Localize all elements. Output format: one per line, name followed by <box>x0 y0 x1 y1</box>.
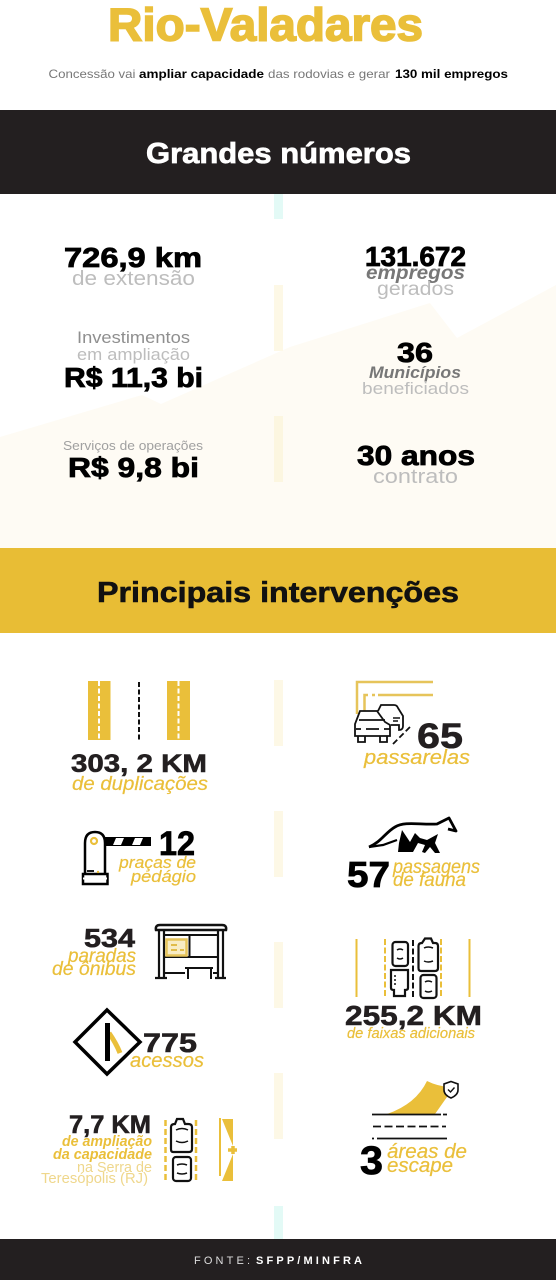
icon: road duplication <box>88 681 190 740</box>
stat: investimentos em ampliação: Investimentos <box>77 328 190 347</box>
stat: ampliação da capacidade: na Serra de <box>77 1160 152 1176</box>
background mountain shape <box>0 285 556 548</box>
stat: ampliação da capacidade: de ampliação <box>62 1134 152 1150</box>
stat: empregos: 131.672 <box>365 241 466 272</box>
stat: municípios: Municípios <box>369 363 461 382</box>
stat: acessos: 775 <box>143 1028 197 1058</box>
icon: escape ramp <box>372 1081 458 1138</box>
icon: access sign <box>75 1010 140 1074</box>
source credit <box>194 1255 362 1267</box>
stat: acessos <box>130 1028 204 1072</box>
stat: ampliação da capacidade: Teresópolis (RJ) <box>41 1171 148 1187</box>
stat: ampliação da capacidade: da capacidade <box>53 1147 152 1163</box>
stat: investimentos em ampliação: em ampliação <box>77 345 190 364</box>
stat: investimentos em ampliação: R$ 11,3 bi <box>64 362 203 393</box>
icon: bus stop <box>155 925 226 979</box>
stat: passagens de fauna: 57 <box>347 854 390 895</box>
stat: áreas de escape: escape <box>387 1155 453 1177</box>
stat: extensão: de extensão <box>72 268 195 290</box>
stat: praças de pedágio <box>118 825 196 886</box>
stat: serviços de operações: R$ 9,8 bi <box>68 452 199 483</box>
stat: ampliação da capacidade <box>41 1111 152 1187</box>
footer <box>0 1239 556 1280</box>
subtitle: ampliar capacidade <box>139 67 264 81</box>
stat: acessos: acessos <box>130 1050 204 1072</box>
panel: grandes números <box>0 110 556 194</box>
stat: áreas de escape <box>360 1139 467 1183</box>
stat: paradas de ônibus <box>52 923 137 980</box>
panel: principais intervenções <box>0 548 556 633</box>
stat: paradas de ônibus: 534 <box>84 923 136 953</box>
stat: passagens de fauna <box>347 854 480 895</box>
stat: contrato <box>357 440 475 488</box>
stat: contrato: 30 anos <box>357 440 475 471</box>
stat: paradas de ônibus: de ônibus <box>52 959 137 980</box>
icon: additional lanes cars <box>356 938 470 998</box>
stat: passagens de fauna: passagens <box>392 857 480 878</box>
stat: faixas adicionais: 255,2 KM <box>345 1000 482 1031</box>
subtitle: Concessão vai <box>48 67 136 81</box>
stat: praças de pedágio: praças de <box>118 853 196 872</box>
icon: widened lane cars <box>166 1118 237 1181</box>
stat: extensão: 726,9 km <box>64 242 202 273</box>
stat: áreas de escape: 3 <box>360 1139 383 1183</box>
stat: paradas de ônibus: paradas <box>67 946 136 967</box>
stat: passarelas <box>363 717 470 769</box>
title: Rio-Valadares <box>108 0 423 50</box>
subtitle <box>48 67 508 81</box>
subtitle: 130 mil empregos <box>395 67 508 81</box>
stat: investimentos em ampliação <box>64 328 203 393</box>
stat: contrato: contrato <box>373 466 458 488</box>
icon: toll barrier <box>83 832 151 884</box>
stat: empregos: gerados <box>377 279 454 300</box>
stat: passagens de fauna: de fauna <box>393 870 466 891</box>
stat: duplicações: 303, 2 KM <box>71 750 207 778</box>
source credit: SFPP/MINFRA <box>256 1255 362 1267</box>
subtitle: das rodovias e gerar <box>268 67 390 81</box>
icon: fox <box>369 818 456 853</box>
stat: ampliação da capacidade: 7,7 KM <box>69 1111 151 1139</box>
stat: empregos <box>365 241 466 300</box>
stat: praças de pedágio: 12 <box>159 825 195 863</box>
heading: grandes números: Grandes números <box>146 138 411 170</box>
stat: municípios: 36 <box>397 337 433 368</box>
source credit: FONTE: <box>194 1255 250 1267</box>
icon: footbridge and cars <box>355 682 433 744</box>
heading: principais intervenções: Principais intervenções <box>97 577 459 609</box>
stat: municípios: beneficiados <box>362 379 469 398</box>
stat: faixas adicionais <box>345 1000 482 1042</box>
stat: extensão <box>64 242 202 290</box>
stat: serviços de operações: Serviços de operações <box>63 438 204 453</box>
stat: praças de pedágio: pedágio <box>130 867 196 886</box>
stat: duplicações <box>71 750 209 795</box>
stat: municípios <box>362 337 469 398</box>
stat: faixas adicionais: de faixas adicionais <box>347 1026 475 1042</box>
stat: empregos: empregos <box>366 263 465 284</box>
stat: serviços de operações <box>63 438 204 483</box>
stat: duplicações: de duplicações <box>72 774 209 795</box>
stat: passarelas: 65 <box>417 717 463 756</box>
stat: passarelas: passarelas <box>363 747 470 769</box>
stat: áreas de escape: áreas de <box>387 1141 467 1163</box>
